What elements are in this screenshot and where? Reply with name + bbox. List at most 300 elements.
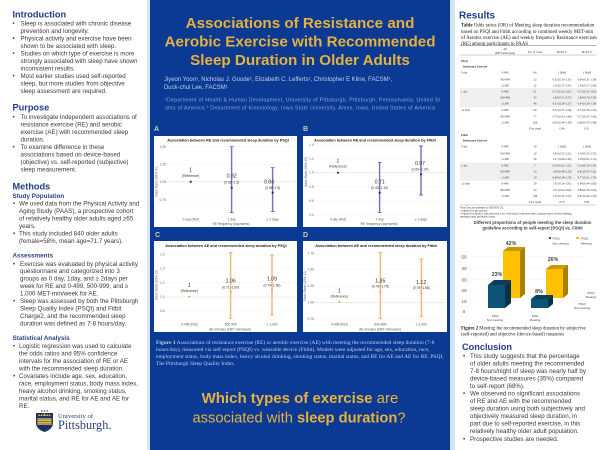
chart D: AE and sleep by Fitbit: 0.75 (308, 317, 314, 321)
table: odds ratios: 1.60 (0.71-4.57) (553, 96, 571, 100)
bar: yellow 26%: 26% (548, 257, 559, 263)
purpose section: • (12, 144, 15, 151)
purpose section: duration. (20, 136, 45, 143)
table: odds ratios: 0.86 (0.50-1.48) (578, 120, 596, 124)
takeaway question: Which types of exercise are (202, 390, 398, 407)
table: odds ratios: (MET-min/week) (495, 51, 515, 55)
introduction section: • (12, 73, 15, 80)
panel: central blue background (150, 0, 450, 450)
statistical analysis (12, 335, 138, 410)
study population: This study included 840 older adults (19, 230, 118, 237)
chart: meeting sleep guideline by PSQI and Fitbit: Meeting (586, 295, 597, 299)
statistical analysis: intervals for the association of RE or AE (19, 358, 128, 365)
introduction section: Studies on which type of exercise is more (20, 51, 135, 58)
assessments: • (13, 261, 15, 268)
chart C: AE and sleep by PSQI: AE minutes (MET-min/week) (209, 328, 251, 332)
chart D: AE and sleep by Fitbit: 1.50 (308, 268, 314, 272)
chart: meeting sleep guideline by PSQI and Fitbit: PSQI (578, 302, 586, 306)
table: odds ratios: 22 (534, 77, 537, 81)
chart D: AE and sleep by Fitbit: 0-499 (Ref) (331, 322, 348, 326)
chart B: RE and sleep by Fitbit: 0.8 (309, 185, 314, 189)
chart A: RE and sleep by PSQI: RE frequency (day/week) (212, 222, 250, 226)
chart D: AE and sleep by Fitbit: 500-999 (374, 322, 387, 326)
chart B: RE and sleep by Fitbit: 0.71 (375, 180, 385, 186)
chart C: AE and sleep by PSQI: 500-999 (225, 322, 237, 326)
table: odds ratios: ≥1,000 (501, 194, 510, 198)
chart C: AE and sleep by PSQI: 1 (188, 283, 191, 289)
table: odds ratios: 0.67 (0.37-1.20) (553, 108, 571, 112)
introduction section: • (12, 51, 15, 58)
logo: University of Pittsburgh: Pittsburgh. (58, 418, 111, 432)
table: odds ratios: 266 (533, 120, 538, 124)
chart: meeting sleep guideline by PSQI and Fitbit (461, 220, 597, 322)
table: odds ratios: Model 1ᵃ (557, 50, 567, 54)
chart B: RE and sleep by Fitbit: 1.4 (309, 143, 314, 147)
chart C: AE and sleep by PSQI: 1.09 (267, 276, 277, 282)
table: odds ratios: 0.64 (0.30-1.36) (578, 102, 596, 106)
chart A: RE and sleep by PSQI: ≥ 2 days (266, 218, 279, 222)
table: odds ratios: 44 (534, 188, 537, 192)
chart C: AE and sleep by PSQI: Association between AE and recommended sleep duration by PSQI (165, 244, 287, 248)
study population: (female=58%, mean age=71.7 years). (19, 238, 123, 245)
chart D: AE and sleep by Fitbit: (Reference) (331, 294, 348, 298)
table: odds ratios: 0.81 (584, 200, 590, 204)
chart C: AE and sleep by PSQI: 1.2 (160, 281, 165, 285)
table: odds ratios (460, 46, 596, 218)
study population: Aging Study (PAAS), a prospective cohort (19, 208, 134, 215)
purpose section: exercise (AE) with recommended sleep (20, 129, 129, 136)
table: odds ratios: 0.82 (0.48-1.39) (553, 120, 571, 124)
chart C: AE and sleep by PSQI: 1.0 (160, 295, 165, 299)
title (165, 15, 435, 69)
legend: PSQI (581, 236, 588, 240)
chart B: RE and sleep by Fitbit: 0.6 (309, 199, 314, 203)
conclusion section: This study suggests that the percentage (470, 353, 580, 360)
chart B: RE and sleep by Fitbit: ≥ 2 days (415, 218, 428, 222)
purpose section: sleep measurement. (20, 166, 77, 173)
chart A: RE and sleep by PSQI: 0 day (Ref) (183, 218, 199, 222)
chart A: RE and sleep by PSQI: 1 day (228, 218, 236, 222)
purpose section (12, 103, 137, 173)
table: odds ratios: ᵃ Adjusted for age and sex. (460, 209, 488, 212)
results heading: Results (459, 10, 496, 22)
table caption: of Aerobic exercise (AE) and weekly frequency Resistance exercises (461, 36, 597, 41)
table: odds ratios: 500-999 (500, 188, 510, 192)
chart B: RE and sleep by Fitbit: 0.4 (309, 213, 314, 217)
legend: Meeting (581, 241, 592, 245)
conclusion section: part due to self-reported exercise, in this (470, 420, 580, 428)
chart B: RE and sleep by Fitbit: 1 day (376, 218, 384, 222)
assessments: duration was defined as 7-8 hours/day. (20, 321, 126, 328)
title: Sleep Duration in Older Adults (190, 52, 410, 69)
table: odds ratios: ᵇ Adjusted for model 1 plus education, race, work status, body mass index category, heavy alcohol drinking, (460, 211, 572, 215)
table: odds ratios: PSQI (461, 59, 469, 63)
chart B: RE and sleep by Fitbit: B (303, 126, 308, 133)
table: odds ratios: No. of cases (528, 50, 543, 54)
conclusion section: device-based measures (35%) compared (470, 376, 584, 382)
chart: meeting sleep guideline by PSQI and Fitbit: Not meeting (574, 306, 590, 310)
assessments: week for RE and 0-499, 500-999, and ≥ (19, 283, 129, 290)
introduction section: • (12, 36, 15, 43)
table: odds ratios: 0.72 (0.32-1.63) (578, 90, 596, 94)
table: odds ratios: 0.64 (0.31-1.36) (578, 77, 596, 81)
statistical analysis: heavy alcohol drinking, smoking status, (19, 388, 127, 395)
chart C: AE and sleep by PSQI: (0.71~1.60) (222, 286, 239, 290)
table caption: based on PSQI and Fitbit according to combined weekly MET-min (461, 30, 594, 35)
purpose section: To examine difference in these (20, 144, 105, 151)
chart A: RE and sleep by PSQI: 1.00 (160, 180, 166, 184)
methods section (12, 182, 140, 410)
conclusion section: Prospective studies are needed. (470, 436, 559, 443)
table: odds ratios: 1.27 (0.66-2.44) (553, 157, 571, 161)
table: odds ratios: 0.43 (0.22-1.21) (553, 164, 571, 168)
table caption: (RE) among participants in PAAS (461, 42, 528, 47)
table: odds ratios: 1 (Ref) (583, 71, 591, 75)
study population: • (13, 230, 15, 237)
chart D: AE and sleep by Fitbit: 1.00 (308, 300, 314, 304)
figure 2 caption: (self-reported) and objective (device-based) measures (461, 333, 564, 338)
study population: years. (19, 223, 36, 230)
table: odds ratios: 13 (534, 170, 537, 174)
affiliations (165, 98, 441, 112)
table: odds ratios: 21 (534, 90, 537, 94)
statistical analysis: Logistic regression was used to calculate (19, 343, 132, 350)
chart B: RE and sleep by Fitbit: Association between RE and recommended sleep duration by Fitbit (314, 138, 437, 142)
study population (12, 193, 140, 245)
chart D: AE and sleep by Fitbit: 1 (338, 288, 341, 294)
table: odds ratios: 0.74 (0.36-1.32) (578, 108, 596, 112)
introduction section: inconsistent results. (20, 66, 75, 73)
chart A: RE and sleep by PSQI: 1 (189, 168, 192, 174)
chart title (474, 220, 592, 230)
chart C: AE and sleep by PSQI: 0.8 (160, 309, 165, 313)
table: odds ratios: ≥1,000 (501, 102, 510, 106)
conclusion section: Conclusion (462, 342, 512, 352)
introduction section: Physical activity and exercise have been (20, 36, 132, 43)
chart: meeting sleep guideline by PSQI and Fitbit: PSQI (587, 291, 595, 295)
conclusion section: objectively measured sleep duration, in (470, 413, 578, 420)
statistical analysis: race, employment status, body mass index, (19, 380, 138, 387)
statistical analysis: marital status, and RE for AE and AE for (19, 395, 129, 402)
table: odds ratios: 1.06 (0.51-2.21) (553, 151, 571, 155)
table: odds ratios: 0-499 (502, 145, 509, 149)
table: odds ratios: 46 (534, 102, 537, 106)
table: odds ratios: Note: Data are presented as OR (95% CI). (460, 206, 504, 209)
chart B: RE and sleep by Fitbit: (0.69~1.37) (412, 168, 428, 172)
legend: Not meeting (552, 241, 569, 245)
conclusion section: • (463, 353, 465, 360)
table: odds ratios: 1 (Ref) (558, 145, 566, 149)
table: odds ratios: 0.61 (0.29-1.27) (553, 102, 571, 106)
chart B: RE and sleep by Fitbit: 1.2 (309, 157, 314, 161)
statistical analysis: • (13, 343, 15, 350)
introduction section: • (12, 21, 15, 28)
conclusion section (462, 342, 587, 443)
table: odds ratios: 1 day (461, 164, 468, 168)
introduction section: shown to be associated with sleep. (20, 43, 116, 50)
table: odds ratios: 0.68 (0.38-1.70) (553, 176, 571, 180)
statistical analysis: with the recommended sleep duration. (18, 365, 124, 372)
chart B: RE and sleep by Fitbit (303, 126, 447, 227)
introduction section: strongly associated with sleep have shown (20, 58, 138, 65)
table: odds ratios: P for trend (529, 200, 542, 204)
chart A: RE and sleep by PSQI: 0.92 (227, 174, 237, 180)
table: odds ratios: Model 2ᵇ (582, 50, 592, 54)
assessments: Exercise was evaluated by physical activity (20, 261, 139, 268)
table: odds ratios: 500-999 (500, 77, 510, 81)
chart A: RE and sleep by PSQI (154, 126, 297, 227)
chart B: RE and sleep by Fitbit: (0.45~1.10) (371, 186, 388, 190)
figure 2 caption: Figure 2 Meeting the recommended sleep duration by subjective (461, 326, 586, 332)
conclusion section: of RE and AE with the recommended (470, 398, 572, 405)
chart B: RE and sleep by Fitbit: 0 day (Ref) (330, 218, 346, 222)
table: odds ratios: 1.10 (0.57-2.41) (553, 83, 571, 87)
table: odds ratios: 0.77 (0.31-1.74) (578, 176, 596, 180)
bar: teal 23%: 23% (492, 272, 503, 278)
legend (549, 236, 592, 245)
table: odds ratios: 0-499 (502, 71, 509, 75)
table: odds ratios: 186 (533, 194, 538, 198)
conclusion section: of older adults meeting the recommended (470, 360, 585, 368)
purpose section: To investigate independent associations of (20, 114, 137, 121)
table: odds ratios: AE (503, 47, 507, 51)
assessments: Charge2, and the recommended sleep (20, 313, 126, 320)
chart C: AE and sleep by PSQI: ≥ 1,000 (267, 322, 278, 326)
table: odds ratios: 0-499 (502, 90, 509, 94)
chart D: AE and sleep by Fitbit: (0.76~1.75) (372, 284, 389, 288)
chart: meeting sleep guideline by PSQI and Fitbit: Not meeting (487, 318, 503, 322)
statistical analysis: RE. (19, 403, 30, 410)
table: odds ratios: 59 (534, 108, 537, 112)
table: odds ratios: 1 (Ref) (558, 71, 566, 75)
assessments: groups as 0 day, 1day, and ≥ 2days per (20, 276, 128, 283)
chart D: AE and sleep by Fitbit: AE minutes (MET-min/week) (359, 328, 401, 332)
chart C: AE and sleep by PSQI: 1.4 (160, 266, 165, 270)
statistical analysis: Statistical Analysis (12, 335, 70, 342)
table: odds ratios: 0.75 (0.37-1.46) (578, 114, 596, 118)
authors: Duck-chul Lee, FACSM¹ (164, 85, 228, 91)
introduction section: sleep, but more studies from objective (20, 80, 125, 87)
figure 2 caption (461, 326, 586, 338)
table: odds ratios: 0.70 (0.43-1.46) (553, 114, 571, 118)
conclusion section: • (463, 390, 465, 398)
statistical analysis: Covariates include age, sex, education, (19, 373, 127, 380)
table: odds ratios: 0-499 (502, 108, 509, 112)
takeaway question: associated with sleep duration? (192, 410, 406, 426)
chart C: AE and sleep by PSQI: 1.06 (226, 278, 236, 284)
table: odds ratios: 1 (Ref) (583, 145, 591, 149)
chart D: AE and sleep by Fitbit: 1.12 (416, 280, 426, 286)
table: odds ratios: 0.62 (0.30-1.31) (553, 77, 571, 81)
table: odds ratios: 1.21 (0.62-2.02) (553, 188, 571, 192)
chart B: RE and sleep by Fitbit: Odds Ratio (95% CI) (304, 157, 308, 187)
panel: right column (459, 10, 597, 443)
introduction section: Introduction (12, 10, 66, 20)
conclusion section: • (463, 436, 465, 443)
chart A: RE and sleep by PSQI: Odds Ratio (95% CI) (154, 166, 158, 197)
table: odds ratios: 500-999 (500, 96, 510, 100)
table: odds ratios: 19 (534, 176, 537, 180)
introduction section (12, 10, 138, 95)
chart: meeting sleep guideline by PSQI and Fitbit: 10 (461, 299, 467, 305)
purpose section: associations based on device-based (20, 151, 121, 158)
bar: yellow 42%: 42% (506, 241, 517, 247)
statistical analysis: the odds ratios and 95% confidence (19, 350, 118, 357)
chart D: AE and sleep by Fitbit: 1.35 (375, 278, 385, 284)
chart B: RE and sleep by Fitbit: RE frequency (day/week) (360, 222, 398, 226)
chart A: RE and sleep by PSQI: (0.56~1.5) (224, 180, 239, 184)
conclusion section: We observed no significant associations (470, 390, 580, 398)
figure 1 caption (156, 339, 444, 367)
authors (164, 77, 393, 91)
table: odds ratios: 29 (534, 182, 537, 186)
chart: meeting sleep guideline by PSQI and Fitbit: 0 (463, 309, 466, 315)
introduction section: Most earlier studies used self-reported (20, 73, 126, 80)
purpose section: • (12, 114, 15, 121)
chart: meeting sleep guideline by PSQI and Fitbit: Fitbit (532, 314, 538, 318)
legend: PSQI (552, 236, 560, 240)
table: odds ratios: 1.05 (0.54-1.91) (553, 182, 571, 186)
table: odds ratios: ≥1,000 (501, 83, 510, 87)
affiliations: ates of America ² Department of Kinesiology, Iowa State University, Ames, Iowa, United States of America (165, 106, 435, 112)
table: odds ratios: 19 (534, 151, 537, 155)
table: odds ratios: Fitbit (461, 133, 468, 137)
study population: Study Population (12, 193, 64, 200)
table: odds ratios: 1.18 (0.55-2.55) (578, 151, 596, 155)
authors: Jiyeon Yoon¹, Nicholas J. Goode¹, Elizabeth C. Lefferts², Christopher E Kline, FACSM¹, (164, 77, 393, 83)
table: odds ratios: 0.72 (559, 200, 565, 204)
takeaway question (192, 390, 406, 426)
conclusion section: 7-8 hours/night of sleep was nearly half by (470, 368, 587, 375)
table: odds ratios: 0.88 (0.44-1.85) (578, 182, 596, 186)
chart D: AE and sleep by Fitbit: (0.76~1.68) (413, 286, 430, 290)
chart D: AE and sleep by Fitbit: 1.75 (308, 252, 314, 256)
chart A: RE and sleep by PSQI: 1.50 (160, 145, 166, 149)
table: odds ratios: 35 (534, 96, 537, 100)
statistical analysis: • (13, 373, 15, 380)
chart C: AE and sleep by PSQI: 1.6 (160, 252, 165, 256)
purpose section: Purpose (12, 103, 49, 113)
introduction section: Sleep is associated with chronic disease (20, 21, 132, 28)
chart D: AE and sleep by Fitbit: Association between AE and recommended sleep duration by Fitbit (315, 244, 438, 248)
table caption (461, 24, 597, 47)
chart B: RE and sleep by Fitbit: 1 (337, 158, 340, 164)
introduction section: prevention and longevity. (20, 28, 89, 35)
table: odds ratios: Resistance Exercise (463, 65, 488, 69)
table: odds ratios: ≥1,000 (501, 176, 510, 180)
chart B: RE and sleep by Fitbit: (Reference) (329, 164, 347, 168)
chart: meeting sleep guideline by PSQI and Fitbit: Fitbit (492, 314, 498, 318)
chart C: AE and sleep by PSQI: (Reference) (181, 289, 198, 293)
table: odds ratios: P for trend (529, 126, 542, 130)
table: odds ratios: 7 (534, 164, 536, 168)
chart D: AE and sleep by Fitbit: Odds Ratio (95% CI) (303, 271, 307, 301)
assessments (12, 253, 139, 328)
affiliations: ¹Department of Health & Human Development, University of Pittsburgh, Pittsburgh, Pennsylvania, United St (165, 98, 441, 104)
study population: • (13, 200, 15, 207)
table: odds ratios: 0.34 (0.19-1.29) (578, 164, 596, 168)
table: odds ratios: 32 (534, 83, 537, 87)
chart A: RE and sleep by PSQI: Association between RE and recommended sleep duration by PSQI (167, 138, 289, 142)
table: odds ratios: ≥1,000 (501, 157, 510, 161)
panel: left column (12, 10, 140, 432)
table: odds ratios: 28 (534, 157, 537, 161)
chart B: RE and sleep by Fitbit: 0.97 (415, 161, 425, 167)
table: odds ratios: ≥2 days (461, 108, 471, 112)
table: odds ratios: 0-499 (502, 182, 509, 186)
table: odds ratios: 0.81 (0.47-2.22) (578, 170, 596, 174)
table: odds ratios: 500-999 (500, 114, 510, 118)
title: Aerobic Exercise with Recommended (165, 34, 435, 50)
chart C: AE and sleep by PSQI (154, 232, 297, 332)
table: odds ratios: 1.18 (0.57-2.46) (578, 83, 596, 87)
chart: meeting sleep guideline by PSQI and Fitbit: 20 (461, 288, 467, 294)
chart B: RE and sleep by Fitbit: 1.0 (309, 170, 314, 174)
table: odds ratios: 19 (534, 145, 537, 149)
assessments: Assessments (12, 253, 54, 260)
logo: University of Pittsburgh: University of (58, 413, 94, 420)
chart A: RE and sleep by PSQI: 0.84 (264, 180, 274, 186)
table caption: Table Odds ratios (OR) of Meeting sleep duration recommendation (461, 24, 595, 29)
table: odds ratios: 0.72 (0.32-1.61) (553, 90, 571, 94)
chart A: RE and sleep by PSQI: (Reference) (182, 174, 199, 178)
chart A: RE and sleep by PSQI: A (154, 126, 159, 133)
methods section: Methods (12, 182, 50, 192)
chart D: AE and sleep by Fitbit: D (303, 232, 308, 239)
chart: meeting sleep guideline by PSQI and Fitbit: 30 (461, 278, 467, 284)
conclusion section: sleep duration using both subjectively and (470, 406, 585, 412)
chart C: AE and sleep by PSQI: Odds Ratio (95% CI) (154, 270, 158, 300)
introduction section: sleep assessment are required. (20, 88, 107, 95)
figure 1 caption: hours/day), measured via self-report (PSQI) vs. wearable device (Fitbit). Models were adjusted for age, sex, education, race, (156, 346, 430, 353)
assessments: • (13, 298, 15, 305)
study population: We used data from the Physical Activity and (19, 200, 140, 207)
table: odds ratios: 1.39 (0.61-2.14) (578, 157, 596, 161)
study population: of relatively healthy older adults aged ≥65 (19, 216, 134, 223)
chart: meeting sleep guideline by PSQI and Fitbit: 40 (461, 266, 467, 272)
chart D: AE and sleep by Fitbit (303, 232, 447, 332)
table: odds ratios: smoking status, and marital status. (460, 215, 496, 218)
chart C: AE and sleep by PSQI: 0-499 (Ref) (181, 322, 198, 326)
table: odds ratios: 1 day (461, 90, 468, 94)
logo: University of Pittsburgh (36, 409, 111, 432)
bar: teal 8%: 8% (535, 289, 543, 295)
table: odds ratios: 64 (534, 71, 537, 75)
chart D: AE and sleep by Fitbit: 1.25 (308, 284, 314, 288)
table: odds ratios: 1.35 (0.47-1.55) (553, 194, 571, 198)
chart A: RE and sleep by PSQI: (0.56~1.5) (265, 186, 280, 190)
purpose section: resistance exercise (RE) and aerobic (20, 121, 122, 128)
table: odds ratios: 1.00 (0.48-2.20) (553, 170, 571, 174)
conclusion section: to self-report (68%). (470, 383, 525, 390)
chart: meeting sleep guideline by PSQI and Fitbit: 50 (461, 255, 467, 261)
chart A: RE and sleep by PSQI: 1.25 (160, 162, 166, 166)
chart C: AE and sleep by PSQI: C (155, 232, 160, 239)
table: odds ratios: 0.87 (0.44-1.76) (578, 194, 596, 198)
chart C: AE and sleep by PSQI: (0.74~1.58) (264, 284, 280, 288)
table: odds ratios: 500-999 (500, 151, 510, 155)
table: odds ratios: 0 day (461, 145, 468, 149)
assessments: questionnaire and categorized into 3 (20, 268, 120, 275)
chart D: AE and sleep by Fitbit: ≥ 1,000 (416, 322, 427, 326)
table: odds ratios: 500-999 (500, 170, 510, 174)
table: odds ratios: 0 day (461, 71, 468, 75)
table: odds ratios: 0.88 (0.39-1.95) (578, 188, 596, 192)
table: odds ratios: 0.51 (584, 126, 590, 130)
figure 1 caption: employment status, body mass index, heavy alcohol drinking, smoking status, marital status, and RE for AE and AE for RE. PSQI, (156, 353, 444, 360)
table: odds ratios: 0.46 (559, 126, 565, 130)
table: odds ratios: 1.68 (0.76-3.58) (578, 96, 596, 100)
